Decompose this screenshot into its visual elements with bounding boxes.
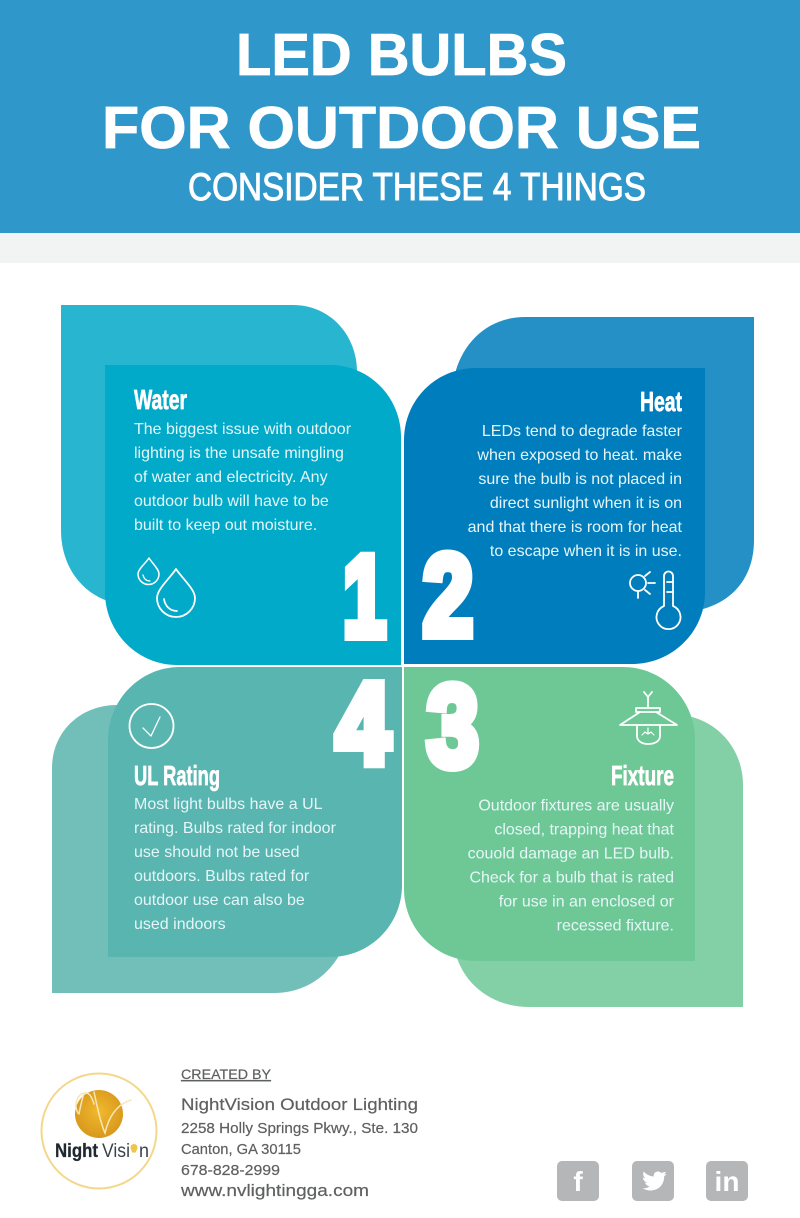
heat front shape bbox=[404, 368, 705, 664]
UL front shape bbox=[108, 667, 402, 957]
number 1: 1 bbox=[343, 533, 386, 661]
fixture front shape bbox=[404, 667, 695, 961]
company contact details bbox=[180, 1066, 418, 1200]
icon: twitter bbox=[632, 1161, 674, 1201]
fixture back shape bbox=[456, 715, 743, 1007]
logo: NightVision: n bbox=[139, 1141, 149, 1162]
created by label: CREATED BY bbox=[181, 1066, 272, 1082]
UL text: rating. Bulbs rated for indoor bbox=[134, 820, 337, 837]
icon: check circle bbox=[130, 704, 174, 748]
panel: UL rating bbox=[52, 660, 402, 993]
water text: lighting is the unsafe mingling bbox=[134, 445, 344, 462]
UL text bbox=[134, 796, 337, 933]
water text: outdoor bulb will have to be bbox=[134, 493, 329, 510]
logo: NightVision: Night bbox=[55, 1141, 99, 1162]
subtitle: CONSIDER THESE 4 THINGS bbox=[188, 166, 646, 209]
fixture text: couold damage an LED bulb. bbox=[468, 846, 674, 862]
heat heading: Heat bbox=[640, 386, 682, 417]
heat text: LEDs tend to degrade faster bbox=[482, 423, 683, 440]
panel: fixture bbox=[404, 662, 743, 1007]
UL heading: UL Rating bbox=[134, 760, 220, 791]
title: LED BULBS bbox=[236, 22, 567, 88]
fixture text: Outdoor fixtures are usually bbox=[478, 798, 674, 814]
UL text: outdoor use can also be bbox=[134, 892, 305, 909]
water text: The biggest issue with outdoor bbox=[134, 421, 352, 438]
fixture text: Check for a bulb that is rated bbox=[469, 870, 674, 886]
heat text bbox=[468, 423, 683, 560]
header banner bbox=[0, 0, 800, 263]
icon: hanging lamp bbox=[620, 692, 677, 744]
UL text: Most light bulbs have a UL bbox=[134, 796, 323, 813]
fixture heading: Fixture bbox=[611, 760, 674, 791]
panel: water bbox=[61, 305, 401, 665]
UL text: outdoors. Bulbs rated for bbox=[134, 868, 310, 885]
company contact details: 2258 Holly Springs Pkwy., Ste. 130 bbox=[181, 1121, 418, 1137]
water text bbox=[134, 421, 352, 534]
heat text: and that there is room for heat bbox=[468, 519, 683, 536]
icon: facebook: f bbox=[573, 1166, 583, 1197]
water heading: Water bbox=[134, 384, 187, 415]
water front shape bbox=[105, 365, 401, 665]
water text: of water and electricity. Any bbox=[134, 469, 328, 486]
panel: heat bbox=[404, 317, 754, 664]
logo: NightVision bbox=[42, 1074, 156, 1188]
fixture text: for use in an enclosed or bbox=[499, 894, 675, 910]
logo: NightVision: Visi bbox=[102, 1141, 130, 1162]
water back shape bbox=[61, 305, 357, 600]
heat back shape bbox=[456, 317, 754, 609]
company contact details: www.nvlightingga.com bbox=[180, 1181, 369, 1200]
UL back shape bbox=[52, 705, 342, 993]
title: FOR OUTDOOR USE bbox=[102, 95, 701, 161]
number 4: 4 bbox=[336, 660, 390, 788]
company contact details: NightVision Outdoor Lighting bbox=[181, 1095, 418, 1114]
fixture text: recessed fixture. bbox=[557, 918, 674, 934]
icon: linkedin: in bbox=[715, 1166, 739, 1197]
fixture text bbox=[468, 798, 675, 934]
company contact details: Canton, GA 30115 bbox=[181, 1142, 301, 1158]
fixture text: closed, trapping heat that bbox=[494, 822, 675, 838]
icon: sun and thermometer bbox=[630, 572, 681, 629]
number 2: 2 bbox=[423, 532, 473, 660]
heat text: to escape when it is in use. bbox=[490, 543, 682, 560]
company contact details: 678-828-2999 bbox=[181, 1163, 280, 1179]
heat text: when exposed to heat. make bbox=[476, 447, 682, 464]
title bbox=[102, 22, 701, 161]
heat text: direct sunlight when it is on bbox=[490, 495, 682, 512]
number 3: 3 bbox=[427, 662, 478, 790]
UL text: use should not be used bbox=[134, 844, 299, 861]
water text: built to keep out moisture. bbox=[134, 517, 317, 534]
UL text: used indoors bbox=[134, 916, 226, 933]
heat text: sure the bulb is not placed in bbox=[478, 471, 682, 488]
icon: facebook bbox=[557, 1161, 599, 1201]
icon: water drops bbox=[138, 558, 195, 617]
icon: linkedin bbox=[706, 1161, 748, 1201]
